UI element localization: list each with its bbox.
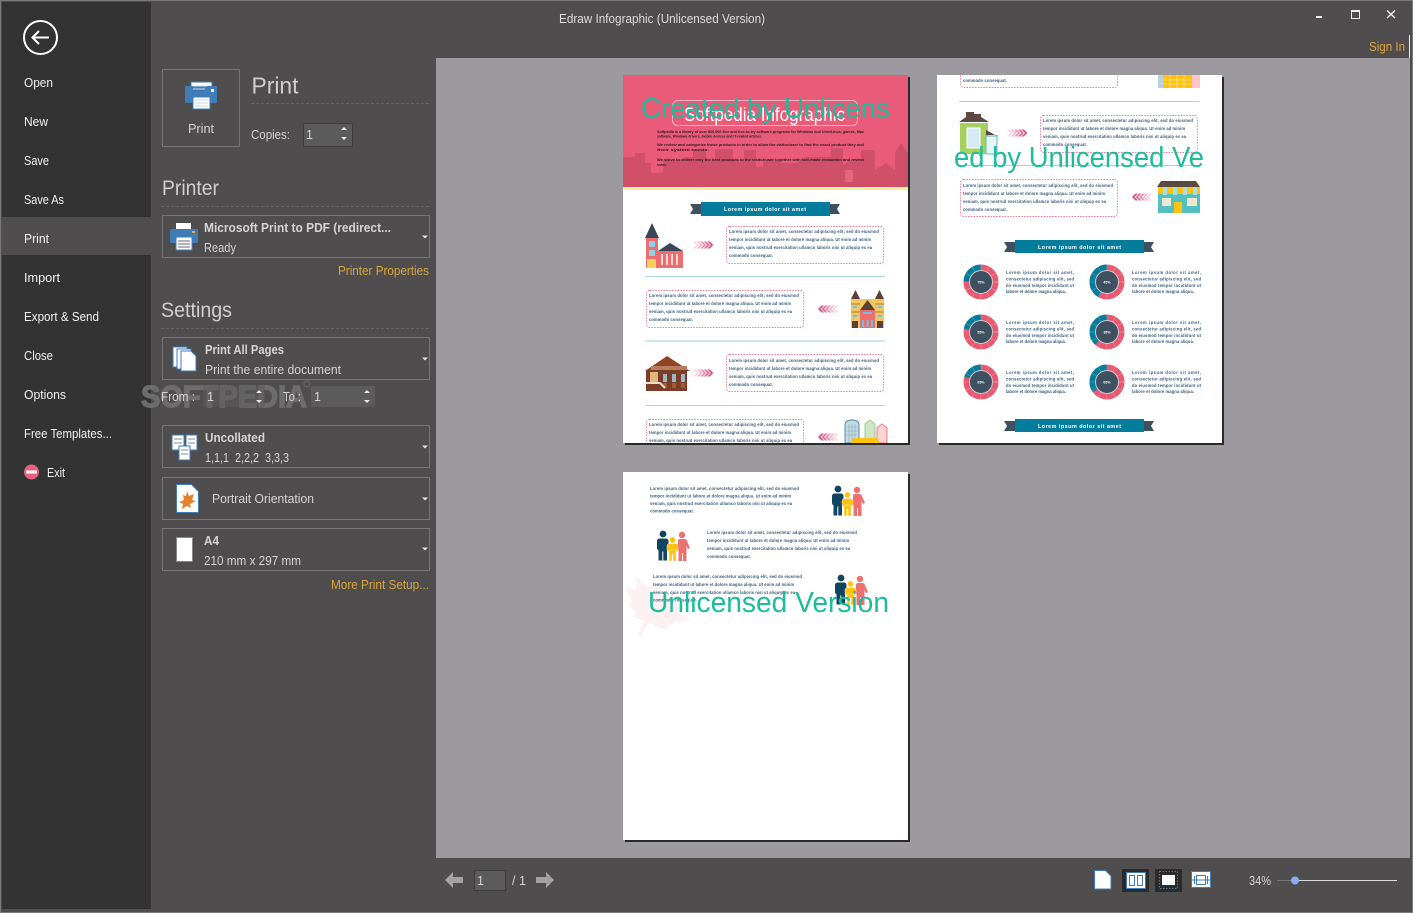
icon: maple leaf watermark <box>626 577 690 637</box>
text box 1 <box>726 226 884 264</box>
more print setup link: More Print Setup... <box>331 578 429 592</box>
continued text box <box>960 75 1118 88</box>
panel: bottom toolbar <box>445 869 1397 892</box>
arrow: chevrons left <box>1132 194 1152 200</box>
icon: family 2 <box>657 531 690 561</box>
donut chart: 35%: 35% <box>1103 330 1111 334</box>
panel: print settings <box>141 70 430 592</box>
donut text: Lorem ipsum dolor sit amet, <box>1132 370 1201 375</box>
text block 3: Lorem ipsum dolor sit amet, consectetur adipiscing elit, sed do eiusmod <box>653 574 802 579</box>
text box 1: tempor incididunt ut labore et dolore magna aliqua. Ut enim ad minim <box>729 237 871 242</box>
donut text <box>1132 270 1202 294</box>
collation selector <box>162 426 430 468</box>
donut chart: 65%: 65% <box>977 380 985 384</box>
page 1 preview <box>623 75 910 456</box>
text block 2: veniam, quis nostrud exercitation ullamco laboris nisi ut aliquip ex ea <box>707 546 851 551</box>
donut text: Lorem ipsum dolor sit amet, <box>1132 320 1201 325</box>
donut chart: 65% <box>963 364 999 400</box>
orientation selector <box>162 478 430 520</box>
menu items <box>24 76 112 480</box>
print button <box>162 70 240 146</box>
donut chart: 65% second: 65% <box>1103 380 1111 384</box>
donut text: do eiusmod tempor incididunt ut <box>1006 383 1075 388</box>
donut text: labore et dolore magna aliqua. <box>1132 339 1194 344</box>
ribbon heading: Lorem ipsum dolor sit amet <box>724 207 806 213</box>
menu items: Import <box>24 271 61 285</box>
text box 5 <box>1040 116 1198 152</box>
page range inputs <box>161 386 375 407</box>
text block 3 <box>653 574 802 602</box>
donut text: Lorem ipsum dolor sit amet, <box>1006 320 1074 325</box>
icon: red tower house <box>645 223 683 268</box>
zoom slider <box>1277 876 1397 884</box>
text box 5: tempor incididunt ut labore et dolore magna aliqua. Ut enim ad minim <box>1043 126 1185 131</box>
sign in link: Sign In <box>1369 40 1405 54</box>
text box 2: commodo consequat. <box>649 317 693 322</box>
arrow: next page <box>536 872 554 888</box>
collation selector: Uncollated <box>205 431 265 445</box>
printer selector: Microsoft Print to PDF (redirect... <box>204 221 391 235</box>
arrow: chevrons right <box>1007 130 1027 136</box>
ribbon heading: Lorem ipsum dolor sit amet <box>1038 424 1121 430</box>
page number input: / 1 <box>512 874 526 888</box>
window controls <box>1316 10 1395 18</box>
print range selector <box>162 338 430 380</box>
text box 3: Lorem ipsum dolor sit amet, consectetur adipiscing elit, sed do eiusmod <box>729 358 879 363</box>
page range inputs: 1 <box>314 390 321 404</box>
printer selector <box>162 216 430 258</box>
text block 2: Lorem ipsum dolor sit amet, consectetur adipiscing elit, sed do eiusmod <box>707 530 857 535</box>
menu items: Print <box>24 232 50 246</box>
header banner: Softpedia Infographic <box>684 105 845 126</box>
menu items: Save As <box>24 193 64 207</box>
text box 3: commodo consequat. <box>729 382 773 387</box>
collation selector: 1,1,1 2,2,2 3,3,3 <box>205 451 289 465</box>
donut text: labore et dolore magna aliqua. <box>1006 289 1066 294</box>
arrow: chevrons left <box>818 434 838 440</box>
donut text: Lorem ipsum dolor sit amet, <box>1006 370 1074 375</box>
donut text <box>1132 370 1202 394</box>
menu items: Save <box>24 154 49 168</box>
print range selector: Print the entire document <box>205 363 342 377</box>
donut text: do eiusmod tempor incididunt ut <box>1132 283 1202 288</box>
donut text: Lorem ipsum dolor sit amet, <box>1006 270 1074 275</box>
continued text box: commodo consequat. <box>963 78 1007 83</box>
arrow: chevrons right <box>693 370 713 376</box>
text box 4: Lorem ipsum dolor sit amet, consectetur adipiscing elit, sed do eiusmod <box>649 422 799 427</box>
text block 1: tempor incididunt ut labore et dolore magna aliqua. Ut enim ad minim <box>650 494 791 498</box>
text box 2: Lorem ipsum dolor sit amet, consectetur adipiscing elit, sed do eiusmod <box>649 293 799 298</box>
text box 5: veniam, quis nostrud exercitation ullamco laboris nisi ut aliquip ex ea <box>1043 134 1187 139</box>
banner description: notes. <box>657 162 667 167</box>
icon: two page view <box>1122 869 1149 892</box>
icon: single page view <box>1094 870 1111 889</box>
banner description: We review and categorize these products in order to allow the visitor/user to find the exact product they and <box>657 142 865 147</box>
heading: print: Print <box>252 72 299 98</box>
print range selector: Print All Pages <box>205 343 284 357</box>
donut text: consectetur adipiscing elit, sed <box>1132 326 1201 332</box>
text block 3: tempor incididunt ut labore et dolore magna aliqua. Ut enim ad minim <box>653 582 794 587</box>
page number input: 1 <box>477 874 484 888</box>
donut text: consectetur adipiscing elit, sed <box>1132 276 1201 282</box>
page 3 preview <box>623 472 910 842</box>
donut text: Lorem ipsum dolor sit amet, <box>1132 270 1201 275</box>
text box 2: veniam, quis nostrud exercitation ullamco laboris nisi ut aliquip ex ea <box>649 309 793 314</box>
donut text: consectetur adipiscing elit, sed <box>1006 376 1074 382</box>
text block 2: tempor incididunt ut labore et dolore magna aliqua. Ut enim ad minim <box>707 538 849 543</box>
copies spinner <box>251 124 352 146</box>
donut chart: 75% <box>966 268 996 296</box>
copies spinner: Copies: <box>251 128 290 142</box>
icon: family 3 <box>835 575 868 605</box>
page 2 preview <box>937 60 1224 445</box>
text box 2 <box>646 290 804 328</box>
donut text <box>1006 370 1075 394</box>
donut text: do eiusmod tempor incididunt ut <box>1006 283 1075 288</box>
text block 1 <box>650 486 799 514</box>
donut chart: 45%: 45% <box>1103 280 1111 284</box>
text box 2: tempor incididunt ut labore et dolore magna aliqua. Ut enim ad minim <box>649 301 791 306</box>
donut text <box>1006 270 1075 294</box>
donut chart: 55%: 55% <box>977 330 985 334</box>
text block 1: commodo consequat. <box>650 508 694 514</box>
donut chart: 35% <box>1090 314 1124 350</box>
ribbon heading <box>1004 419 1154 432</box>
ribbon heading: Lorem ipsum dolor sit amet <box>1038 245 1121 251</box>
icon: fit page view <box>1155 869 1182 892</box>
text box 6 <box>960 180 1118 216</box>
menu items: Export & Send <box>24 310 99 324</box>
title bar <box>559 10 1410 58</box>
text box 6: tempor incididunt ut labore et dolore magna aliqua. Ut enim ad minim <box>963 191 1105 196</box>
watermark text: Created by Unlicens <box>641 93 890 125</box>
zoom percentage: 34% <box>1249 874 1271 888</box>
arrow: previous page <box>445 872 463 888</box>
text box 5: Lorem ipsum dolor sit amet, consectetur adipiscing elit, sed do eiusmod <box>1043 118 1193 123</box>
donut chart: 45% <box>1090 264 1124 300</box>
menu items: Options <box>24 388 66 402</box>
text box 1: Lorem ipsum dolor sit amet, consectetur adipiscing elit, sed do eiusmod <box>729 229 879 234</box>
donut chart: 65% second <box>1089 364 1124 400</box>
icon: family 1 <box>832 486 865 516</box>
donut text: labore et dolore magna aliqua. <box>1132 289 1194 294</box>
print button: Print <box>188 122 215 136</box>
menu items: New <box>24 115 49 129</box>
text box 3: tempor incididunt ut labore et dolore magna aliqua. Ut enim ad minim <box>729 366 871 371</box>
donut text: consectetur adipiscing elit, sed <box>1006 276 1074 282</box>
watermark text: ed by Unlicensed Ve <box>954 142 1204 174</box>
icon: shop <box>1157 181 1200 213</box>
text box 4: tempor incididunt ut labore et dolore magna aliqua. Ut enim ad minim <box>649 430 791 435</box>
donut text <box>1006 320 1075 344</box>
text box 1: commodo consequat. <box>729 253 773 258</box>
text block 1: Lorem ipsum dolor sit amet, consectetur adipiscing elit, sed do eiusmod <box>650 486 799 491</box>
panel: preview area <box>436 58 1410 858</box>
menu items: Close <box>24 349 53 363</box>
donut chart: 75%: 75% <box>977 280 985 284</box>
printer properties link: Printer Properties <box>338 264 429 278</box>
text box 6: commodo consequat. <box>963 207 1007 212</box>
text box 6: veniam, quis nostrud exercitation ullamco laboris nisi ut aliquip ex ea <box>963 199 1107 204</box>
page range inputs: To : <box>283 390 301 404</box>
orientation selector: Portrait Orientation <box>212 492 314 506</box>
donut chart: 55% <box>964 315 998 349</box>
page range inputs: 1 <box>207 390 214 404</box>
banner description: We strive to deliver only the best products to the visitor/user together with self-made evaluation and review <box>657 157 865 162</box>
menu items: Exit <box>47 466 65 480</box>
banner description <box>657 129 865 167</box>
donut text <box>1132 320 1202 344</box>
banner description: their system needs. <box>657 147 709 152</box>
icon: castle <box>851 290 884 328</box>
watermark text: Unlicensed Version <box>648 587 889 619</box>
softpedia watermark: SOFTPEDIA <box>141 379 307 414</box>
paper size selector: 210 mm x 297 mm <box>204 554 301 568</box>
banner description: Softpedia is a library of over 800,000 free and free-to-try software programs for Windows and Unix/Linux, games, Mac <box>657 129 865 134</box>
text box 1: veniam, quis nostrud exercitation ullamco laboris nisi ut aliquip ex ea <box>729 245 873 250</box>
icon: green house <box>959 112 997 154</box>
heading: settings: Settings <box>161 299 232 322</box>
text block 1: veniam, quis nostrud exercitation ullamco laboris nisi ut aliquip ex ea <box>650 501 793 506</box>
text block 2: commodo consequat. <box>707 554 751 559</box>
donut text: labore et dolore magna aliqua. <box>1006 389 1066 394</box>
icon: exit <box>24 464 39 480</box>
donut text: do eiusmod tempor incididunt ut <box>1132 383 1202 388</box>
text box 5: commodo consequat. <box>1043 142 1087 147</box>
arrow: chevrons right <box>693 242 713 248</box>
paper size selector: A4 <box>204 534 219 548</box>
text block 2 <box>707 530 857 559</box>
menu items: Free Templates... <box>24 427 112 441</box>
banner title <box>672 100 858 126</box>
donut text: labore et dolore magna aliqua. <box>1132 389 1194 394</box>
icon: fit width view <box>1192 872 1210 888</box>
sidebar navigation <box>2 2 151 909</box>
heading: printer: Printer <box>162 177 219 200</box>
icon: city buildings <box>845 420 887 443</box>
page number input <box>474 870 526 890</box>
donut text: consectetur adipiscing elit, sed <box>1132 376 1201 382</box>
copies spinner: 1 <box>306 128 313 142</box>
page range inputs: From : <box>161 390 195 404</box>
text box 6: Lorem ipsum dolor sit amet, consectetur adipiscing elit, sed do eiusmod <box>963 183 1113 188</box>
text block 3: commodo consequat. <box>653 598 697 602</box>
donut text: do eiusmod tempor incididunt ut <box>1006 333 1075 338</box>
text block 3: veniam, quis nostrud exercitation ullamco laboris nisi ut aliquip ex ea <box>653 590 796 595</box>
icon: back arrow <box>24 21 57 54</box>
text box 3 <box>726 354 884 392</box>
header banner <box>623 75 908 190</box>
text box 4 <box>646 419 804 443</box>
text box 4: veniam, quis nostrud exercitation ullamco laboris nisi ut aliquip ex ea <box>649 438 793 443</box>
donut text: labore et dolore magna aliqua. <box>1006 339 1066 344</box>
window title: Edraw Infographic (Unlicensed Version) <box>559 12 765 26</box>
donut text: do eiusmod tempor incididunt ut <box>1132 333 1202 338</box>
icon: brown house <box>645 356 690 391</box>
ribbon heading <box>1004 240 1154 253</box>
paper size selector <box>162 528 430 570</box>
text box 3: veniam, quis nostrud exercitation ullamco laboris nisi ut aliquip ex ea <box>729 374 873 379</box>
ribbon heading <box>690 202 840 216</box>
icon: city buildings bottom <box>1158 75 1200 88</box>
banner description: software, Windows drivers, mobile devices and IT-related articles. <box>657 134 762 138</box>
printer selector: Ready <box>204 241 237 255</box>
donut text: consectetur adipiscing elit, sed <box>1006 326 1074 332</box>
arrow: chevrons left <box>818 306 838 312</box>
menu items: Open <box>24 76 53 90</box>
